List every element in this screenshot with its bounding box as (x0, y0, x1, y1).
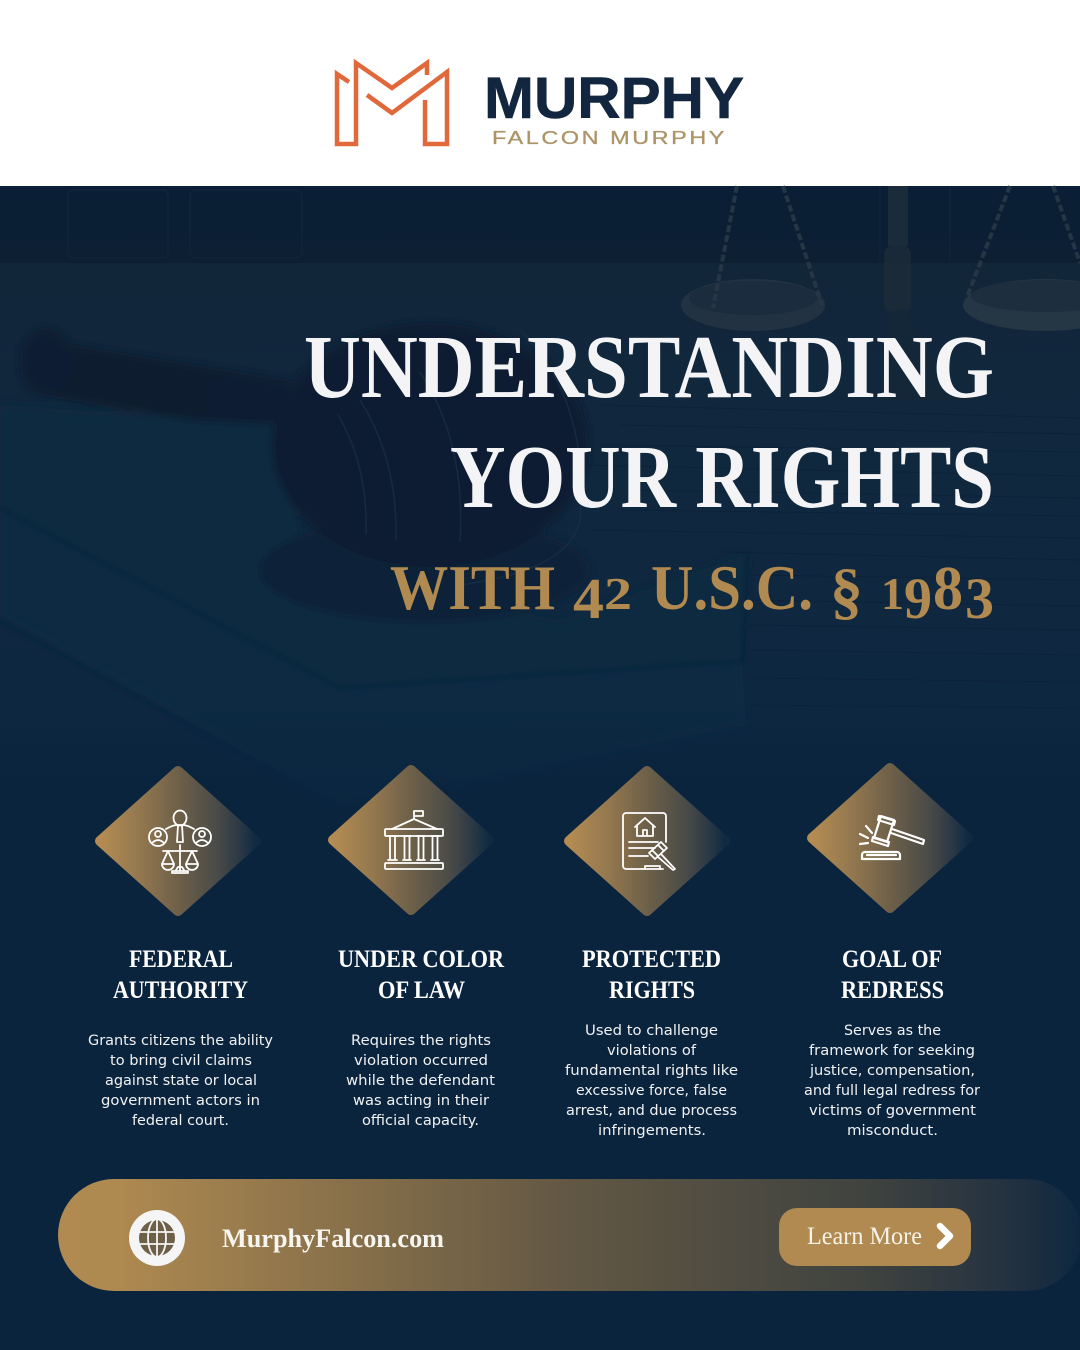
heading: FEDERAL (129, 946, 233, 973)
subtitle: 8 (933, 555, 963, 623)
heading: REDRESS (841, 977, 944, 1004)
header band (0, 0, 1080, 186)
title line 2: YOUR RIGHTS (450, 428, 994, 527)
subtitle: 9 (904, 566, 932, 631)
description: justice, compensation, (809, 1063, 975, 1079)
heading: OF LAW (378, 977, 465, 1004)
footer call-to-action bar (58, 1179, 1080, 1291)
description: fundamental rights like (565, 1063, 738, 1079)
subtitle: § (830, 556, 863, 626)
title line 1: UNDERSTANDING (304, 318, 994, 417)
description: arrest, and due process (566, 1103, 737, 1119)
website: MurphyFalcon.com (222, 1224, 444, 1253)
scales of justice (681, 186, 1080, 400)
description: Used to challenge (585, 1023, 718, 1039)
description: against state or local (105, 1073, 257, 1089)
heading (841, 946, 944, 1004)
description: framework for seeking (809, 1043, 975, 1059)
description: Serves as the (844, 1023, 941, 1039)
logo wordmark: MURPHY (484, 66, 744, 131)
icon: globe (129, 1210, 185, 1266)
icon: chevron (940, 1226, 950, 1246)
description (88, 1033, 273, 1129)
title (304, 318, 994, 631)
description: to bring civil claims (110, 1053, 252, 1069)
subtitle: WITH (390, 553, 555, 623)
heading: RIGHTS (609, 977, 695, 1004)
description: and full legal redress for (804, 1083, 980, 1099)
column: federal authority (88, 771, 273, 1129)
subtitle: 1 (881, 568, 904, 619)
description: while the defendant (346, 1073, 495, 1089)
description (804, 1023, 980, 1139)
logo subline: FALCON MURPHY (492, 128, 727, 148)
description: federal court. (132, 1113, 229, 1129)
column: goal of redress (804, 768, 980, 1139)
heading: PROTECTED (582, 946, 721, 973)
heading (113, 946, 248, 1004)
heading: UNDER COLOR (338, 946, 505, 973)
description: was acting in their (353, 1093, 489, 1109)
column: protected rights (565, 771, 738, 1139)
icon: gavel (812, 768, 968, 908)
description: victims of government (809, 1103, 976, 1119)
description (346, 1033, 495, 1129)
logo mark (337, 63, 447, 144)
heading: GOAL OF (842, 946, 942, 973)
description (565, 1023, 738, 1139)
subtitle: 4 (573, 566, 604, 631)
description: infringements. (598, 1123, 706, 1139)
description: violations of (607, 1043, 697, 1059)
column: under color of law (333, 770, 505, 1129)
learn more button: Learn More (807, 1223, 922, 1250)
description: Grants citizens the ability (88, 1033, 273, 1049)
heading: AUTHORITY (113, 977, 248, 1004)
icon: scales with people (100, 771, 256, 911)
icon: property document and gavel (569, 771, 725, 911)
description: government actors in (101, 1093, 260, 1109)
subtitle: 3 (965, 566, 994, 631)
description: official capacity. (362, 1113, 479, 1129)
heading (582, 946, 721, 1004)
subtitle: 2 (604, 568, 632, 619)
subtitle: U.S.C. (651, 553, 813, 623)
learn more button (779, 1208, 971, 1266)
description: excessive force, false (576, 1083, 727, 1099)
icon: courthouse (333, 770, 489, 910)
description: violation occurred (354, 1053, 488, 1069)
heading (338, 946, 505, 1004)
description: Requires the rights (351, 1033, 491, 1049)
logo (337, 63, 744, 148)
description: misconduct. (847, 1123, 938, 1139)
